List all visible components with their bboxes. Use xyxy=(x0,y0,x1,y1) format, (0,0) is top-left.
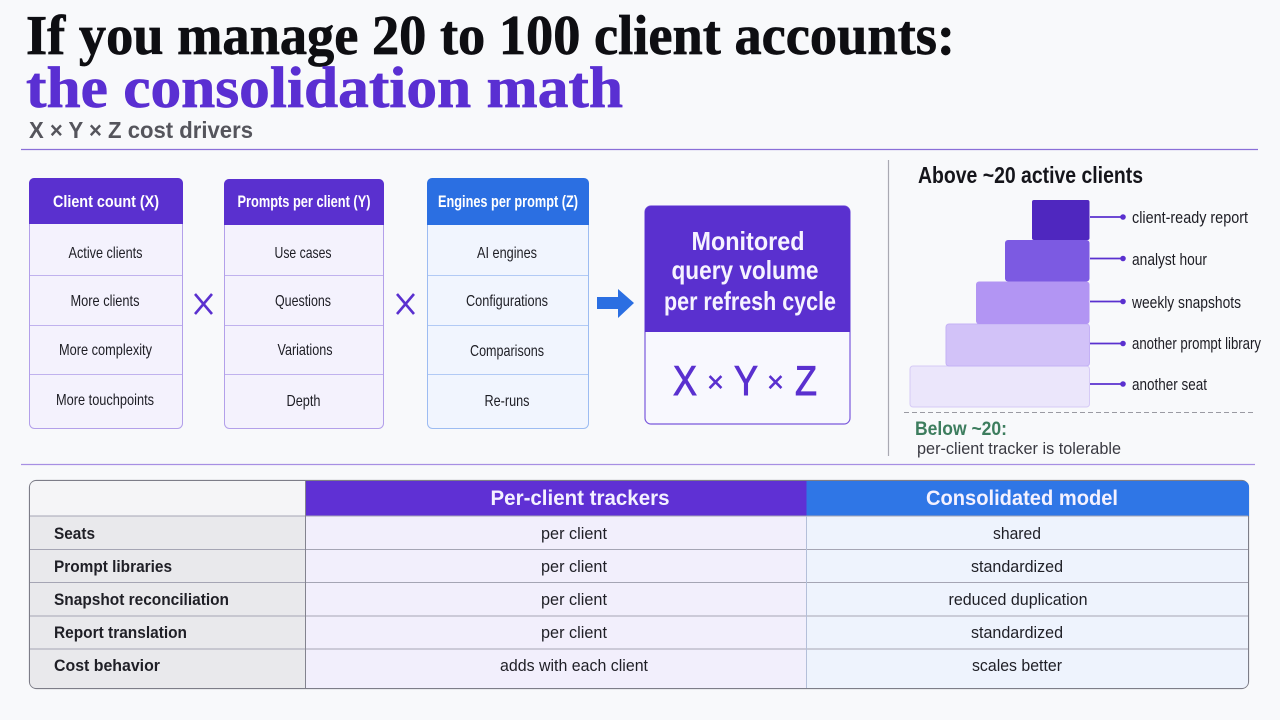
panel: prompts per client column: Depth xyxy=(286,393,320,410)
step: analyst hour: analyst hour xyxy=(1132,251,1207,269)
row: prompt libraries: Prompt libraries xyxy=(54,557,172,576)
comparison table xyxy=(30,480,1249,688)
panel: client count column xyxy=(29,178,183,428)
step: another prompt library xyxy=(946,324,1262,366)
formula: Z xyxy=(795,357,817,404)
formula xyxy=(673,357,817,404)
staircase chart xyxy=(910,200,1262,407)
formula: Y xyxy=(734,357,758,404)
panel: engines per prompt column: AI engines xyxy=(477,245,537,262)
header: consolidated model xyxy=(806,481,1249,516)
panel: engines per prompt column: Comparisons xyxy=(470,343,544,360)
row: seats: Seats xyxy=(54,524,95,543)
row: report translation xyxy=(54,623,1063,642)
step: weekly snapshots xyxy=(976,282,1241,324)
panel: prompts per client column xyxy=(224,179,384,428)
panel: result box xyxy=(645,206,850,424)
row: snapshot reconciliation: per client xyxy=(541,590,607,609)
title: the consolidation math xyxy=(26,55,623,120)
row: prompt libraries xyxy=(54,557,1063,576)
row: report translation: per client xyxy=(541,623,607,642)
step: another seat xyxy=(910,366,1207,407)
step: client-ready report xyxy=(1032,200,1248,240)
step: client-ready report: client-ready report xyxy=(1132,209,1248,227)
panel: prompts per client column: Prompts per client (Y) xyxy=(238,193,370,211)
row: report translation: standardized xyxy=(971,623,1063,642)
panel: prompts per client column: Use cases xyxy=(274,245,332,262)
panel: engines per prompt column xyxy=(427,178,589,428)
header: consolidated model: Consolidated model xyxy=(926,487,1118,510)
panel: client count column: More clients xyxy=(70,293,140,310)
icon: multiply sign 2 xyxy=(397,294,414,314)
header: per-client trackers: Per-client trackers xyxy=(490,487,670,510)
row: cost behavior: scales better xyxy=(972,656,1062,675)
row: cost behavior xyxy=(54,656,1062,675)
row: cost behavior: Cost behavior xyxy=(54,656,160,675)
panel: result box: query volume xyxy=(672,255,818,285)
row: snapshot reconciliation: reduced duplication xyxy=(948,590,1088,609)
header: per-client trackers xyxy=(305,481,806,516)
step: another seat: another seat xyxy=(1132,376,1207,394)
panel: client count column: More touchpoints xyxy=(56,392,154,409)
title xyxy=(26,5,955,120)
panel: client count column: Client count (X) xyxy=(53,193,159,211)
row: prompt libraries: standardized xyxy=(971,557,1063,576)
panel: prompts per client column: Variations xyxy=(278,342,332,359)
row: seats: per client xyxy=(541,524,607,543)
panel: engines per prompt column: Re-runs xyxy=(484,393,530,410)
icon: multiply sign 1 xyxy=(195,294,212,314)
callout: below 20 clients xyxy=(915,419,1121,458)
heading: above 20 clients: Above ~20 active clients xyxy=(918,162,1143,188)
step: analyst hour xyxy=(1005,240,1207,282)
row: seats xyxy=(54,524,1041,543)
panel: result box: Monitored xyxy=(692,226,804,256)
row: report translation: Report translation xyxy=(54,623,187,642)
formula: × xyxy=(707,366,724,399)
callout: below 20 clients: per-client tracker is tolerable xyxy=(917,439,1121,458)
title: If you manage 20 to 100 client accounts: xyxy=(26,5,955,67)
panel: prompts per client column: Questions xyxy=(275,293,331,310)
row: snapshot reconciliation: Snapshot reconciliation xyxy=(54,590,229,609)
row: seats: shared xyxy=(993,524,1041,543)
panel: client count column: More complexity xyxy=(59,342,152,359)
panel: client count column: Active clients xyxy=(68,245,142,262)
subtitle: X × Y × Z cost drivers xyxy=(29,117,253,143)
row: prompt libraries: per client xyxy=(541,557,607,576)
formula: × xyxy=(767,366,784,399)
panel: engines per prompt column: Configurations xyxy=(466,293,548,310)
panel: result box: per refresh cycle xyxy=(664,286,836,316)
formula: X xyxy=(673,357,697,404)
step: weekly snapshots: weekly snapshots xyxy=(1131,294,1241,312)
arrow xyxy=(597,289,634,318)
callout: below 20 clients: Below ~20: xyxy=(915,419,1007,440)
row: snapshot reconciliation xyxy=(54,590,1088,609)
row: cost behavior: adds with each client xyxy=(500,656,648,675)
panel: engines per prompt column: Engines per prompt (Z) xyxy=(438,193,578,211)
